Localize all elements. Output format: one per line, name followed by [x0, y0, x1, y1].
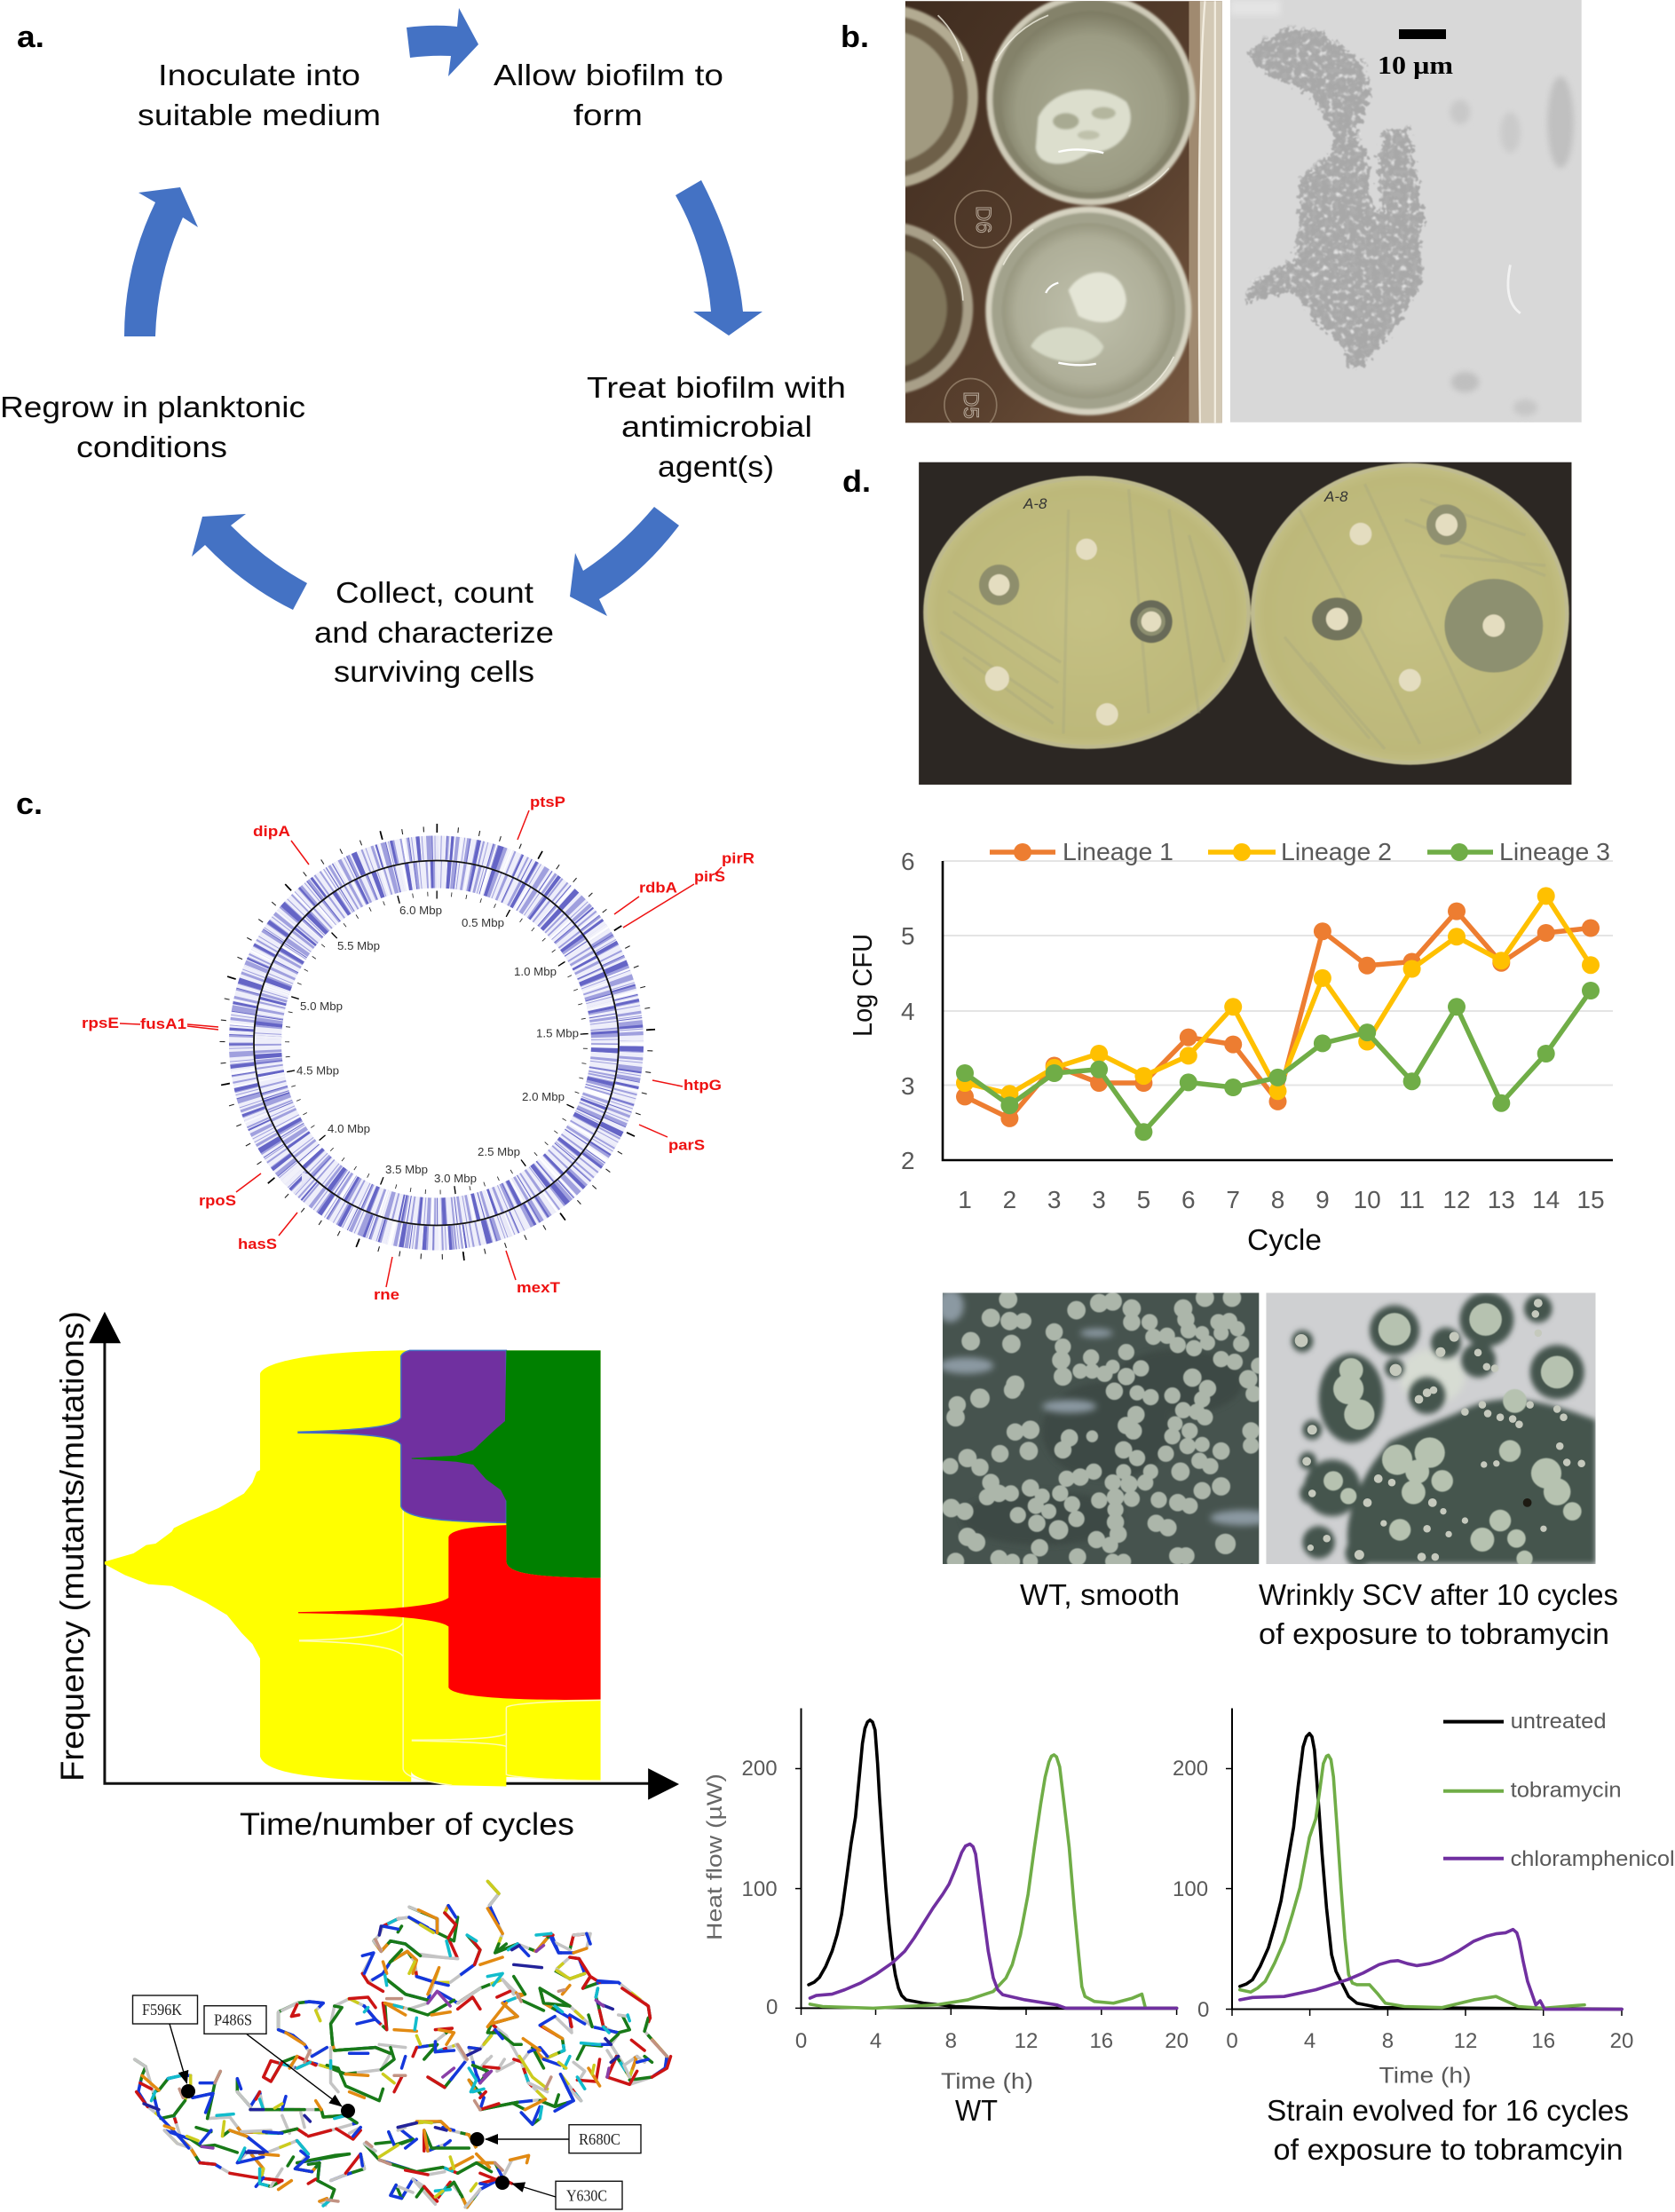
label: time axis right: Time (h): [1379, 2064, 1472, 2089]
position labels: 5.5 Mbp: [337, 939, 380, 952]
arrow: inoculate to biofilm: [407, 8, 478, 76]
backbone: green: [161, 1917, 652, 2200]
caption: evolved strain: Strain evolved for 16 cycles: [1267, 2094, 1629, 2127]
x axis tick labels: 7: [1226, 1186, 1240, 1213]
mutation dots: [181, 2084, 510, 2190]
clone: purple: [298, 1350, 506, 1522]
label c: c.: [16, 787, 43, 821]
panel d: resistance and colony data: [703, 462, 1675, 2166]
gene labels: dipA: [253, 824, 290, 840]
chart: WT heat flow: 12: [1015, 2029, 1038, 2053]
caption: evolved strain: [1267, 2094, 1629, 2166]
gene labels: parS: [668, 1138, 705, 1154]
curve: WT chloramphenicol: [810, 1844, 1177, 2008]
legend: treatments: tobramycin: [1511, 1779, 1622, 1803]
callout: F596K: [133, 1995, 197, 2083]
chart: evolved strain heat flow: 0: [1226, 2029, 1238, 2053]
chart: WT heat flow: 16: [1089, 2029, 1113, 2053]
position labels: 3.0 Mbp: [434, 1172, 477, 1185]
axes: [89, 1312, 679, 1800]
gene labels: rdbA: [639, 881, 677, 897]
step text: treat biofilm: antimicrobial: [621, 410, 812, 443]
backbone: tan: [179, 1939, 667, 2201]
photo: antibiotic disc diffusion plates: [919, 462, 1571, 785]
step text: collect: and characterize: [314, 616, 554, 649]
position labels: [296, 904, 579, 1185]
circular genome map: [82, 794, 755, 1303]
chart: WT heat flow: 4: [870, 2029, 881, 2053]
step text: collect: surviving cells: [334, 655, 534, 688]
x axis tick labels: 10: [1354, 1186, 1381, 1213]
x axis tick labels: 3: [1092, 1186, 1106, 1213]
inner minor ticks: [288, 894, 586, 1192]
position labels: 2.5 Mbp: [478, 1145, 520, 1158]
backbone: orange: [142, 1908, 600, 2201]
position labels: 5.0 Mbp: [300, 999, 343, 1013]
handwriting left plate: A-8: [1023, 495, 1047, 512]
caption: wrinkly SCV: of exposure to tobramycin: [1259, 1617, 1609, 1650]
clone: yellow ancestor: [105, 1350, 601, 1786]
clone boundaries: [299, 1508, 601, 1785]
chart: evolved strain heat flow: 16: [1531, 2029, 1555, 2053]
chart: WT heat flow: 100: [742, 1877, 778, 1901]
gene leader lines: [120, 810, 722, 1287]
panel c: genome, Muller plot and protein: [16, 787, 755, 2209]
caption: wrinkly SCV: [1259, 1578, 1618, 1650]
inner gene track: [268, 874, 605, 1212]
x axis tick labels: 9: [1316, 1186, 1330, 1213]
legend: treatments: untreated: [1511, 1710, 1607, 1734]
label d: d.: [842, 465, 871, 499]
y axis title: Log CFU: [847, 934, 878, 1037]
legend: treatments: chloramphenicol: [1511, 1847, 1675, 1871]
position labels: 2.0 Mbp: [522, 1090, 565, 1103]
backbone: red: [137, 1913, 671, 2201]
step text: allow biofilm: [494, 59, 723, 131]
continuous chain with coloured residues: [135, 1881, 667, 2208]
photo: well plate with biofilm: [905, 1, 1222, 423]
curve: WT untreated: [809, 1720, 1177, 2008]
gene labels: fusA1: [140, 1016, 186, 1032]
curve: evolved tobramycin: [1240, 1755, 1584, 2008]
Muller plot of lineage frequencies: [54, 1311, 679, 1842]
chart: WT heat flow: 8: [945, 2029, 957, 2053]
well label D6: D6: [971, 206, 995, 233]
gene labels: [82, 794, 755, 1303]
arrow: treat to collect: [570, 507, 679, 616]
photo: wrinkly SCV colonies: [1266, 1292, 1596, 1568]
callout: R680C: R680C: [579, 2130, 620, 2148]
position labels: 0.5 Mbp: [462, 916, 504, 929]
caption: WT: WT, smooth: [1020, 1578, 1180, 1611]
step text: regrow: Regrow in planktonic: [0, 391, 305, 423]
panel a: biofilm evolution cycle: [0, 8, 846, 688]
x axis tick labels: 11: [1399, 1186, 1425, 1213]
handwriting right plate: A-8: [1323, 488, 1348, 505]
step text: regrow: [0, 391, 305, 463]
step text: inoculate: [138, 59, 381, 131]
outer gene track: [222, 828, 652, 1258]
series: lineage 3: [965, 991, 1591, 1132]
backbone: cyan: [152, 1933, 629, 2206]
x axis tick labels: 6: [1181, 1186, 1196, 1213]
y axis label: Frequency (mutants/mutations): [54, 1311, 91, 1781]
position labels: 4.5 Mbp: [296, 1064, 339, 1078]
label a: a.: [17, 20, 44, 54]
inner major ticks: [288, 895, 584, 1191]
step text: collect: Collect, count: [336, 576, 533, 609]
gene labels: mexT: [517, 1280, 560, 1296]
photo: WT smooth colonies: [936, 1290, 1276, 1569]
chart: evolved strain heat flow: [1173, 1708, 1633, 2053]
curve: evolved untreated: [1240, 1734, 1622, 2010]
series: lineage 2: [965, 896, 1591, 1094]
protein backbone structure: [133, 1881, 671, 2209]
backbone: navy: [144, 1926, 619, 2153]
panel b: well plate photo and micrograph: [797, 0, 1582, 431]
backbone circle: [254, 861, 619, 1225]
step text: regrow: conditions: [76, 431, 227, 463]
chart: evolved strain heat flow: 4: [1304, 2029, 1316, 2053]
x axis tick labels: 14: [1532, 1186, 1560, 1213]
caption: wrinkly SCV: Wrinkly SCV after 10 cycles: [1259, 1578, 1618, 1611]
chart: WT heat flow: 0: [766, 1995, 778, 2019]
callout: Y630C: Y630C: [566, 2186, 607, 2204]
x axis tick labels: 12: [1442, 1186, 1471, 1213]
clone: red: [298, 1525, 601, 1700]
chart: evolved strain heat flow: 100: [1173, 1877, 1208, 1901]
gene labels: rpsE: [82, 1015, 119, 1031]
y axis tick labels: 4: [901, 998, 915, 1025]
backbone: gray: [135, 1893, 644, 2208]
chart: evolved strain heat flow: 8: [1382, 2029, 1394, 2053]
callout: R680C: [486, 2125, 641, 2153]
arrow: biofilm to treat: [676, 180, 762, 336]
gene labels: hasS: [238, 1236, 277, 1252]
callout: P486S: [204, 2006, 342, 2106]
chart: WT heat flow: [742, 1708, 1189, 2053]
callout: F596K: F596K: [142, 2001, 182, 2018]
callout: Y630C: [512, 2181, 622, 2209]
gene labels: rpoS: [199, 1193, 236, 1209]
gene labels: rne: [374, 1287, 399, 1303]
x axis title: Cycle: [1247, 1223, 1322, 1256]
callout: P486S: P486S: [214, 2011, 252, 2029]
position labels: 1.5 Mbp: [536, 1026, 579, 1040]
x axis tick labels: [958, 1186, 1605, 1213]
well label D5: D5: [959, 391, 983, 419]
label b: b.: [841, 20, 869, 54]
step text: inoculate: suitable medium: [138, 99, 381, 131]
backbone: yellow: [186, 1881, 594, 2197]
gene labels: ptsP: [530, 794, 565, 810]
x axis label: Time/number of cycles: [240, 1807, 574, 1842]
chart: WT heat flow: 0: [795, 2029, 807, 2053]
legend: Lineage 3: [1499, 838, 1610, 865]
position labels: 1.0 Mbp: [514, 965, 557, 978]
position labels: 4.0 Mbp: [328, 1122, 370, 1135]
step text: collect: [314, 576, 554, 688]
scale label: 10 µm: [1378, 51, 1453, 80]
arrow: regrow to inoculate: [124, 187, 198, 336]
series: lineage 1: [965, 912, 1591, 1118]
legend: Lineage 1: [1063, 838, 1173, 865]
y axis tick labels: 5: [901, 922, 915, 950]
gene labels: htpG: [683, 1078, 722, 1094]
label: time axis left: Time (h): [941, 2069, 1033, 2094]
curve: evolved chloramphenicol: [1240, 1930, 1622, 2010]
step text: treat biofilm: [587, 371, 846, 483]
legend: Lineage 2: [1281, 838, 1392, 865]
caption: evolved strain: of exposure to tobramcyin: [1273, 2133, 1623, 2166]
outer minor ticks: [222, 829, 650, 1257]
panel: heat flow charts: [703, 1708, 1675, 2166]
photo: micrograph of cell aggregate: [1230, 0, 1582, 423]
legend: [990, 838, 1610, 865]
arrow: collect to regrow: [192, 514, 307, 610]
gene labels: pirR: [722, 850, 755, 866]
position labels: 3.5 Mbp: [385, 1163, 428, 1176]
chart: evolved strain heat flow: 20: [1610, 2029, 1633, 2053]
clone: green: [412, 1350, 601, 1578]
outer major ticks: [222, 828, 652, 1258]
backbone: purple: [201, 1946, 609, 2148]
y axis tick labels: 2: [901, 1147, 915, 1174]
y axis tick labels: 6: [901, 848, 915, 875]
scale bar: [1399, 29, 1446, 39]
x axis tick labels: 8: [1271, 1186, 1284, 1213]
x axis tick labels: 15: [1576, 1186, 1605, 1213]
y axis tick labels: [901, 848, 915, 1174]
gene labels: pirS: [694, 869, 725, 885]
step text: allow biofilm: Allow biofilm to: [494, 59, 723, 91]
y axis tick labels: 3: [901, 1072, 915, 1100]
x axis tick labels: 5: [1137, 1186, 1150, 1213]
x axis tick labels: 13: [1488, 1186, 1515, 1213]
line chart: Log CFU by cycle: [847, 838, 1613, 1256]
x axis tick labels: 3: [1047, 1186, 1061, 1213]
position labels: 6.0 Mbp: [399, 904, 442, 917]
step text: treat biofilm: Treat biofilm with: [587, 371, 846, 404]
legend: treatments: [1443, 1710, 1675, 1871]
step text: allow biofilm: form: [573, 99, 643, 131]
step text: treat biofilm: agent(s): [658, 450, 774, 483]
caption: WT: WT: [955, 2094, 998, 2127]
chart: evolved strain heat flow: 0: [1197, 1998, 1209, 2022]
chart: evolved strain heat flow: 12: [1454, 2029, 1477, 2053]
chart: evolved strain heat flow: 200: [1173, 1757, 1208, 1781]
curve: WT tobramycin: [810, 1755, 1145, 2008]
backbone: blue: [155, 1906, 648, 2199]
y axis title: Heat flow (µW): [703, 1774, 727, 1940]
chart: WT heat flow: 200: [742, 1757, 778, 1781]
chart: WT heat flow: 20: [1165, 2029, 1189, 2053]
step text: inoculate: Inoculate into: [158, 59, 360, 91]
x axis tick labels: 2: [1003, 1186, 1016, 1213]
x axis tick labels: 1: [958, 1186, 972, 1213]
